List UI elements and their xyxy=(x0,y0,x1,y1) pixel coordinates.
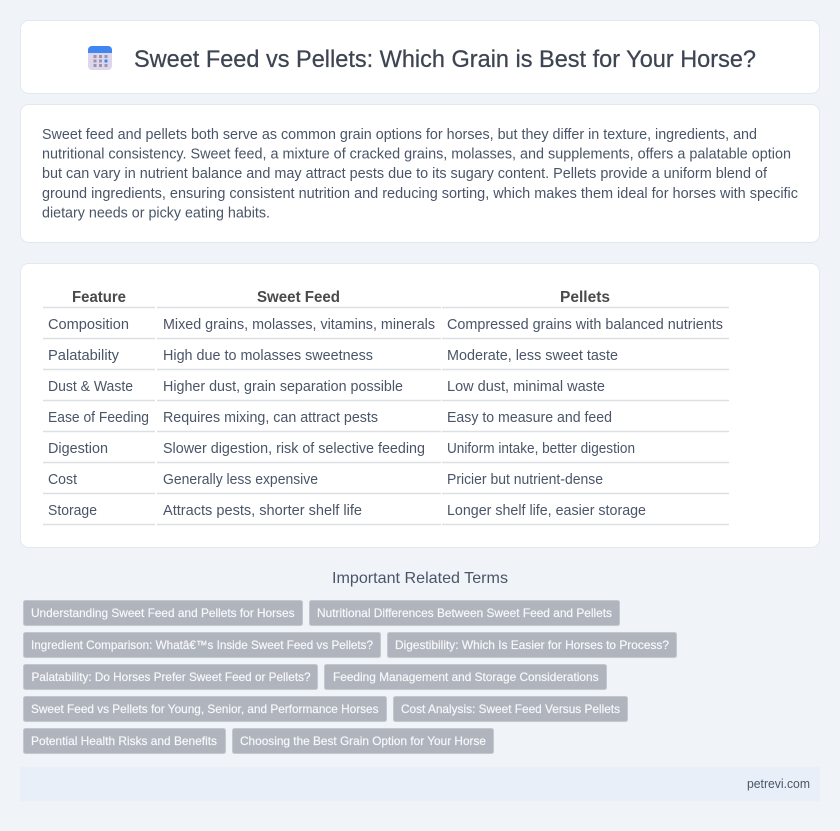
intro paragraph: nutritional consistency. Sweet feed, a mixture of cracked grains, molasses, and supplements, offers a palatable option xyxy=(42,147,791,163)
footer xyxy=(20,767,820,801)
panel: comparison table xyxy=(20,264,820,548)
row: cost: Pricier but nutrient-dense xyxy=(447,472,603,488)
panel: header xyxy=(20,20,820,94)
row: digestion: Uniform intake, better digestion xyxy=(447,441,635,457)
heading: related terms: Important Related Terms xyxy=(332,570,508,587)
tag row 2: Ingredient Comparison: Whatâ€™s Inside Sweet Feed vs Pellets? xyxy=(31,638,373,652)
table header row: Sweet Feed xyxy=(257,289,340,306)
row: dust and waste: Low dust, minimal waste xyxy=(447,379,605,395)
tag row 3: Feeding Management and Storage Considerations xyxy=(333,670,598,684)
row: digestion: Digestion xyxy=(48,441,108,457)
row: composition: Compressed grains with balanced nutrients xyxy=(447,317,723,333)
intro paragraph xyxy=(42,127,798,221)
row: cost: Cost xyxy=(48,472,77,488)
tag row 1: Nutritional Differences Between Sweet Feed and Pellets xyxy=(317,606,612,620)
footer site name: petrevi.com xyxy=(747,776,810,791)
row: palatability: Palatability xyxy=(48,348,120,364)
tag row 1 xyxy=(24,600,620,626)
tag row 4: Sweet Feed vs Pellets for Young, Senior, and Performance Horses xyxy=(31,702,378,716)
row: palatability: Moderate, less sweet taste xyxy=(447,348,618,364)
table rules xyxy=(43,308,729,524)
tag row 3 xyxy=(24,664,606,690)
row: palatability xyxy=(48,348,618,364)
row: ease of feeding: Ease of Feeding xyxy=(48,410,149,426)
row: cost: Generally less expensive xyxy=(163,472,318,488)
row: cost xyxy=(48,472,603,488)
row: palatability: High due to molasses sweetness xyxy=(163,348,373,364)
tag row 4 xyxy=(24,696,628,722)
row: dust and waste: Higher dust, grain separation possible xyxy=(163,379,403,395)
row: storage: Attracts pests, shorter shelf life xyxy=(163,503,362,519)
icon: calendar xyxy=(88,46,112,70)
row: storage: Longer shelf life, easier storage xyxy=(447,503,646,519)
row: dust and waste: Dust & Waste xyxy=(48,379,133,395)
row: dust and waste xyxy=(48,379,605,395)
tag row 3: Palatability: Do Horses Prefer Sweet Feed or Pellets? xyxy=(32,670,311,684)
table header row: Feature xyxy=(72,289,126,306)
tag row 5: Potential Health Risks and Benefits xyxy=(31,734,217,748)
tag row 5 xyxy=(24,728,494,754)
row: ease of feeding xyxy=(48,410,612,426)
tag row 1: Understanding Sweet Feed and Pellets for Horses xyxy=(31,606,294,620)
panel: related term tags xyxy=(24,600,676,754)
row: composition: Composition xyxy=(48,317,129,333)
tag row 4: Cost Analysis: Sweet Feed Versus Pellets xyxy=(401,702,620,716)
row: ease of feeding: Easy to measure and feed xyxy=(447,410,612,426)
intro paragraph: dietary needs or picky eating habits. xyxy=(42,205,270,221)
row: storage xyxy=(48,503,646,519)
row: ease of feeding: Requires mixing, can attract pests xyxy=(163,410,378,426)
tag row 5: Choosing the Best Grain Option for Your Horse xyxy=(240,734,486,748)
row: composition xyxy=(48,317,723,333)
row: storage: Storage xyxy=(48,503,97,519)
tag row 2: Digestibility: Which Is Easier for Horses to Process? xyxy=(395,638,669,652)
table header row xyxy=(72,289,610,306)
panel: introduction xyxy=(20,104,820,242)
intro paragraph: ground ingredients, ensuring consistent nutrition and reducing sorting, which makes them ideal for horses with specific xyxy=(42,186,798,202)
row: composition: Mixed grains, molasses, vitamins, minerals xyxy=(163,317,435,333)
row: digestion: Slower digestion, risk of selective feeding xyxy=(163,441,425,457)
title: Sweet Feed vs Pellets: Which Grain is Best for Your Horse? xyxy=(134,46,756,73)
table header row: Pellets xyxy=(560,289,610,306)
row: digestion xyxy=(48,441,635,457)
tag row 2 xyxy=(24,632,676,658)
intro paragraph: Sweet feed and pellets both serve as common grain options for horses, but they differ in texture, ingredients, and xyxy=(42,127,757,143)
intro paragraph: but can vary in nutrient balance and may attract pests due to its sugary content. Pellets provide a uniform blend of xyxy=(42,166,768,182)
